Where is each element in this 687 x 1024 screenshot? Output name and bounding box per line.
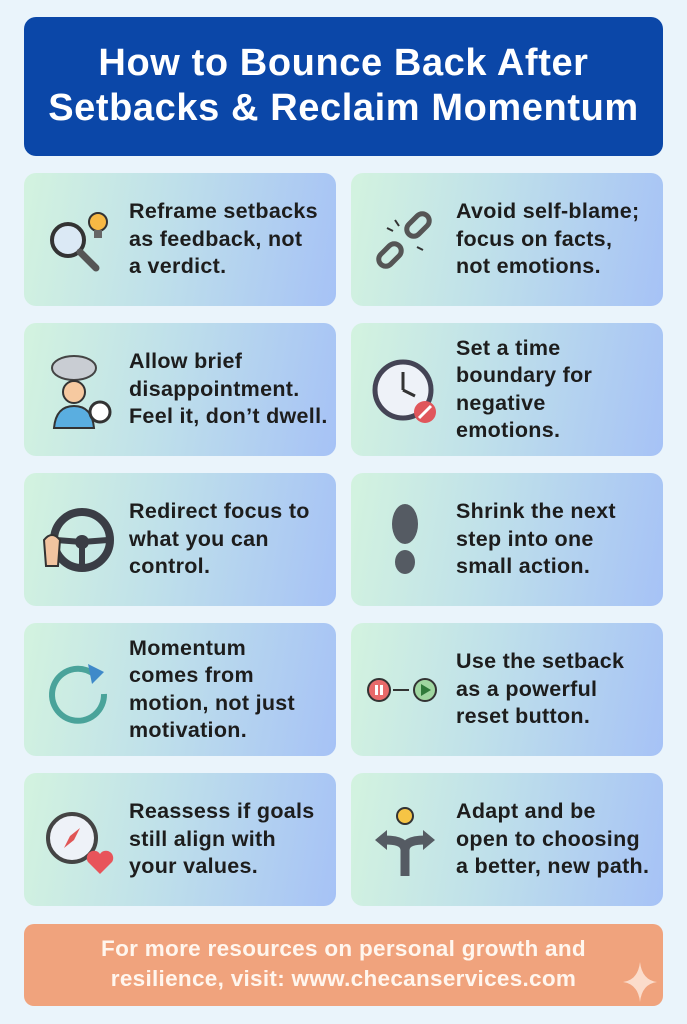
text: reset button. [456, 704, 590, 728]
text: motivation. [129, 718, 247, 742]
card: disappointment [24, 323, 336, 456]
icon: pause to play [367, 678, 437, 702]
footer [24, 924, 663, 1006]
card: reset [351, 623, 663, 756]
card: reassess [24, 773, 336, 906]
icon: footprint [392, 504, 418, 574]
text: comes from [129, 663, 254, 687]
icon: circular arrow [49, 664, 107, 724]
text: still align with [129, 827, 276, 851]
text: focus on facts, [456, 227, 612, 251]
icon: broken chain [376, 211, 432, 269]
title [24, 17, 663, 156]
text [456, 499, 616, 578]
text: Shrink the next [456, 499, 616, 523]
text [129, 199, 318, 278]
text: open to choosing [456, 827, 640, 851]
text [129, 636, 295, 742]
text: what you can [129, 527, 269, 551]
text: not emotions. [456, 254, 601, 278]
card: momentum [24, 623, 336, 756]
footer: For more resources on personal growth and [101, 936, 586, 961]
icon: magnifier and bulb [50, 212, 108, 272]
text [129, 349, 328, 428]
text: Reframe setbacks [129, 199, 318, 223]
text: a verdict. [129, 254, 226, 278]
text: negative [456, 390, 546, 414]
text: Redirect focus to [129, 499, 310, 523]
text: small action. [456, 554, 590, 578]
text: Use the setback [456, 649, 624, 673]
card: redirect focus [24, 473, 336, 606]
card: reframe [24, 173, 336, 306]
text: Avoid self-blame; [456, 199, 640, 223]
text [456, 799, 649, 878]
text: Momentum [129, 636, 246, 660]
icon: clock with stop [372, 360, 436, 423]
icon: split arrow with sun [375, 807, 435, 876]
text: Adapt and be [456, 799, 596, 823]
icon: sparkle [624, 962, 656, 1002]
footer: resilience, visit: www.checanservices.com [111, 966, 576, 991]
text: Set a time [456, 336, 561, 360]
text: your values. [129, 854, 258, 878]
title: How to Bounce Back After [98, 42, 589, 84]
text: Allow brief [129, 349, 242, 373]
title: Setbacks & Reclaim Momentum [48, 87, 639, 129]
text [456, 649, 624, 728]
card: adapt [351, 773, 663, 906]
text: control. [129, 554, 210, 578]
text: Feel it, don’t dwell. [129, 404, 328, 428]
card: shrink step [351, 473, 663, 606]
text [129, 799, 315, 878]
icon: compass and heart [46, 812, 114, 874]
text [129, 499, 310, 578]
text: a better, new path. [456, 854, 649, 878]
icon: person with cloud [51, 355, 112, 429]
text [456, 199, 640, 278]
text: as a powerful [456, 677, 597, 701]
icon: steering wheel [43, 508, 114, 572]
text: disappointment. [129, 377, 300, 401]
text [456, 336, 592, 442]
text: motion, not just [129, 690, 295, 714]
text: as feedback, not [129, 227, 302, 251]
text: emotions. [456, 418, 560, 442]
text: step into one [456, 527, 594, 551]
text: boundary for [456, 363, 592, 387]
text: Reassess if goals [129, 799, 315, 823]
card: time boundary [351, 323, 663, 456]
card: self-blame [351, 173, 663, 306]
